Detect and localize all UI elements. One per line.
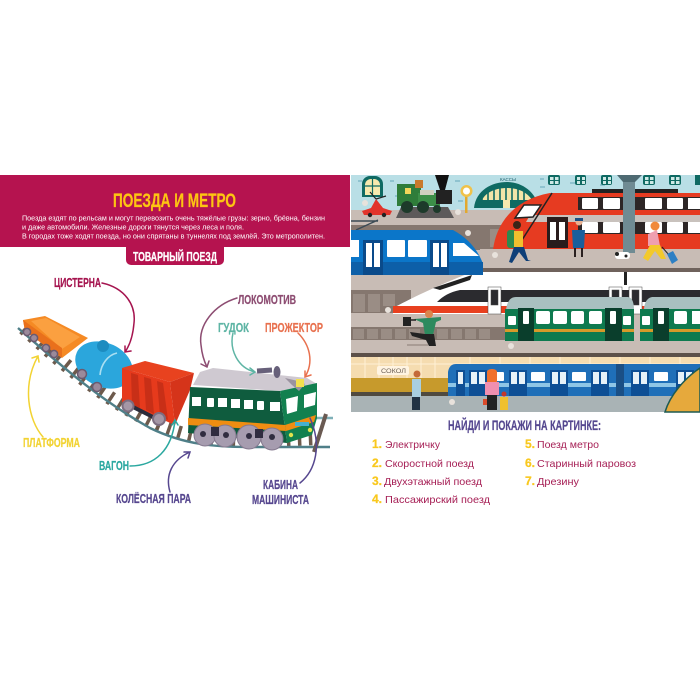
arrow: wheelset (168, 452, 190, 492)
label: horn: ГУДОК (218, 320, 249, 335)
panel: station scene (351, 175, 700, 412)
arrows (29, 283, 316, 492)
dog (615, 252, 630, 259)
person: conductor (572, 218, 585, 257)
intro text (22, 214, 325, 240)
person: running man (403, 310, 441, 346)
list items: Старинный паровоз (537, 458, 636, 470)
number markers (362, 200, 514, 405)
label: tank: ЦИСТЕРНА (54, 275, 101, 290)
title: ПОЕЗДА И МЕТРО (113, 190, 236, 212)
list numbers: 6. (525, 456, 535, 470)
label: driver's cab (252, 477, 309, 507)
arched window (362, 176, 383, 197)
station column (617, 175, 642, 253)
station sign (377, 366, 409, 375)
list items: Пассажирский поезд (385, 494, 490, 506)
freight wagon: platform (23, 316, 88, 358)
list items (384, 439, 636, 506)
stairs (665, 368, 700, 412)
list items: Скоростной поезд (385, 458, 474, 470)
double-decker train (493, 189, 700, 250)
arrow: cab (300, 418, 316, 483)
label: wagon: ВАГОН (99, 458, 129, 473)
list items: Двухэтажный поезд (384, 476, 482, 488)
freight wagon: tank (68, 332, 140, 398)
list numbers: 2. (372, 456, 382, 470)
person: traveller with backpack (507, 221, 531, 263)
list numbers: 3. (372, 474, 382, 488)
arrow: wagon (130, 420, 178, 466)
label: locomotive: ЛОКОМОТИВ (238, 292, 296, 307)
label: headlight: ПРОЖЕКТОР (265, 320, 323, 335)
old steam locomotive (396, 175, 454, 218)
station sign: СОКОЛ (381, 369, 406, 375)
arrow: headlight (298, 333, 311, 377)
list items: Поезд метро (537, 439, 599, 451)
intro text: и даже автомобили. Железные дороги тянутся через леса и поля. (22, 224, 244, 232)
station windows (548, 175, 700, 185)
heading tab: freight train (126, 246, 224, 265)
station building (474, 177, 539, 208)
passenger train (505, 297, 700, 341)
person: man on metro platform (412, 370, 421, 410)
list heading: НАЙДИ И ПОКАЖИ НА КАРТИНКЕ: (448, 418, 601, 433)
labels (23, 275, 323, 507)
railway track (18, 328, 333, 452)
arrow: horn (232, 333, 255, 375)
arrow: platform (29, 356, 43, 437)
station building: КАССЫ (500, 177, 516, 182)
heading tab: freight train: ТОВАРНЫЙ ПОЕЗД (133, 249, 217, 264)
rail car (draisine) (362, 192, 392, 217)
electric train (351, 220, 483, 275)
person: girl with suitcase (643, 222, 678, 264)
list items: Дрезину (537, 476, 580, 488)
label: driver's cab: МАШИНИСТА (252, 492, 309, 507)
list numbers: 1. (372, 437, 382, 451)
platform floor (480, 249, 700, 268)
label: driver's cab: КАБИНА (263, 477, 298, 492)
freight wagon: boxcar (122, 361, 194, 425)
label: platform: ПЛАТФОРМА (23, 435, 80, 450)
metro train (448, 364, 700, 396)
clock post (460, 185, 472, 213)
intro text: В городах тоже ходят поезда, но они спрятаны в туннелях под землёй. Это метрополитен. (22, 232, 325, 240)
label: wheelset: КОЛЁСНАЯ ПАРА (116, 491, 191, 506)
list numbers: 7. (525, 474, 535, 488)
people: mother and child (483, 369, 508, 410)
list items: Электричку (385, 439, 441, 451)
intro text: Поезда ездят по рельсам и могут перевозить очень тяжёлые грузы: зерно, брёвна, бензин (22, 214, 325, 222)
list numbers: 5. (525, 437, 535, 451)
arrow: locomotive (201, 298, 237, 367)
panel: find and show list (372, 418, 636, 506)
locomotive (188, 366, 317, 450)
list numbers: 4. (372, 492, 382, 506)
arrow: tank (102, 283, 134, 352)
high-speed train (393, 272, 700, 314)
panel: header banner (0, 175, 350, 247)
list numbers (372, 437, 535, 506)
metro station wall (351, 357, 700, 412)
